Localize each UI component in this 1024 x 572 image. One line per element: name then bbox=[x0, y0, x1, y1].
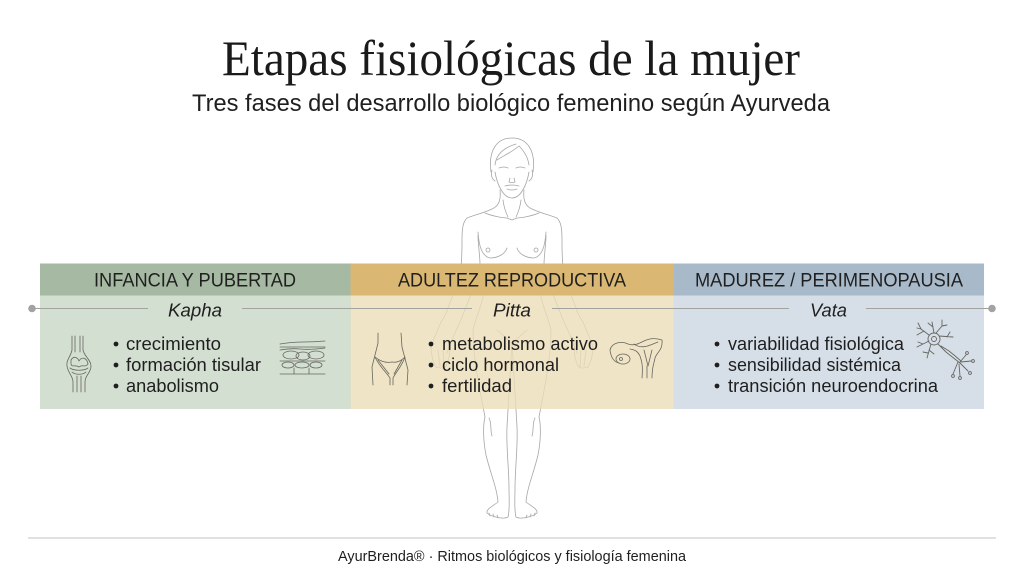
panel header: madurez bbox=[674, 264, 984, 296]
panel body: adultez bbox=[350, 295, 674, 409]
list: Vata bbox=[715, 333, 939, 396]
list: Vata: variabilidad fisiológica bbox=[728, 333, 905, 354]
footer text: AyurBrenda® · Ritmos biológicos y fisiología femenina bbox=[338, 548, 687, 565]
list: Pitta: ciclo hormonal bbox=[442, 354, 559, 375]
list: Kapha: crecimiento bbox=[126, 333, 221, 354]
subtitle: Tres fases del desarrollo biológico femenino según Ayurveda bbox=[192, 90, 830, 117]
list: Pitta bbox=[429, 333, 598, 396]
list: Kapha: formación tisular bbox=[126, 354, 261, 375]
panel: madurez / perimenopausia bbox=[674, 264, 984, 409]
icon: knee joint bbox=[67, 336, 91, 392]
title: Etapas fisiológicas de la mujer bbox=[222, 30, 800, 86]
footer rule bbox=[28, 537, 996, 539]
label: Kapha: Kapha bbox=[168, 300, 222, 320]
human body figure bbox=[431, 138, 593, 518]
heading: infancia y pubertad: INFANCIA Y PUBERTAD bbox=[94, 270, 296, 292]
icon: tissue layers bbox=[280, 341, 325, 374]
heading: madurez / perimenopausia: MADUREZ / PERIMENOPAUSIA bbox=[695, 270, 963, 292]
panel header: adultez bbox=[350, 264, 674, 296]
list: Vata: sensibilidad sistémica bbox=[728, 354, 902, 375]
list: Pitta: fertilidad bbox=[442, 375, 512, 396]
list: Kapha bbox=[114, 333, 261, 396]
label: Pitta: Pitta bbox=[493, 300, 531, 320]
panel: adultez reproductiva bbox=[350, 264, 674, 409]
icon: pelvis bbox=[372, 333, 408, 385]
list: Pitta: metabolismo activo bbox=[442, 333, 598, 354]
panel: infancia y pubertad bbox=[40, 264, 351, 409]
icon: uterus and ovary bbox=[610, 339, 662, 378]
icon: neuron bbox=[917, 320, 974, 379]
heading: adultez reproductiva: ADULTEZ REPRODUCTIVA bbox=[398, 270, 626, 292]
panel body: madurez bbox=[674, 295, 984, 409]
list: Vata: transición neuroendocrina bbox=[728, 375, 939, 396]
panel header: infancia bbox=[40, 264, 351, 296]
label: Vata: Vata bbox=[810, 300, 847, 320]
timeline connector bbox=[28, 305, 996, 312]
panel body: infancia bbox=[40, 295, 351, 409]
list: Kapha: anabolismo bbox=[126, 375, 219, 396]
